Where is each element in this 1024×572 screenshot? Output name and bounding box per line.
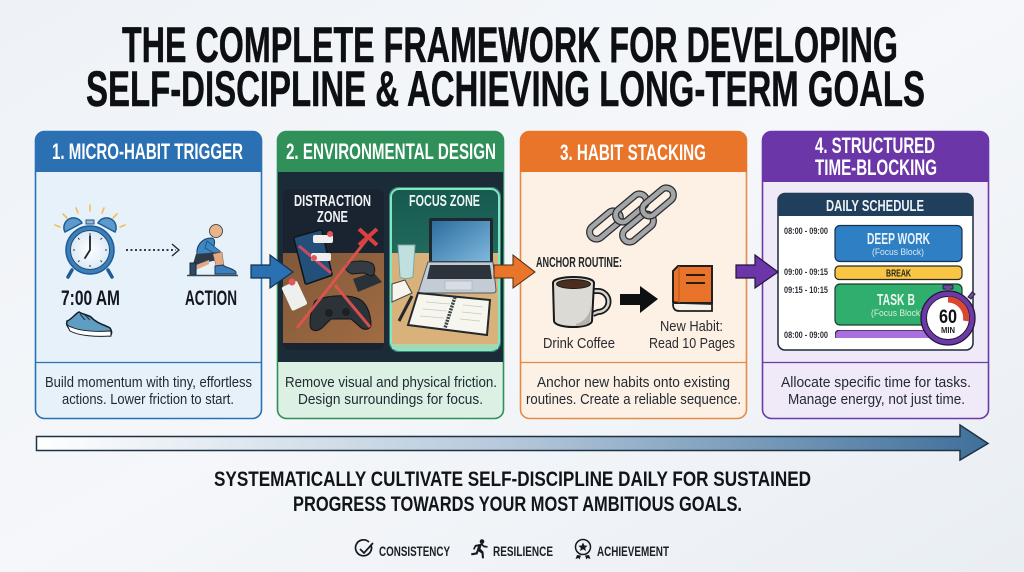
arrow: trigger to action xyxy=(126,244,179,256)
chart: daily schedule: 09:15 - 10:15 xyxy=(784,285,828,295)
label: new habit xyxy=(649,319,735,352)
label: consistency: CONSISTENCY xyxy=(379,544,450,559)
label: 7:00 AM: 7:00 AM xyxy=(61,287,120,310)
arrow: step 1 to 2 xyxy=(251,255,293,288)
label: resilience: RESILIENCE xyxy=(493,544,553,559)
label: anchor routine: ANCHOR ROUTINE: xyxy=(536,255,622,271)
icon: sneaker xyxy=(67,312,112,336)
icon: alarm clock xyxy=(55,205,125,277)
text block: step 1 description: actions. Lower friction to start. xyxy=(62,392,234,408)
icon: achievement badge xyxy=(576,540,590,560)
chart: daily schedule: TASK B xyxy=(877,292,915,309)
text block: step 1 description: Build momentum with tiny, effortless xyxy=(45,375,252,391)
chart: daily schedule: DEEP WORK xyxy=(867,231,930,248)
heading: step 4: TIME-BLOCKING xyxy=(815,155,937,180)
title xyxy=(86,17,925,117)
icon: consistency check xyxy=(356,540,373,556)
footer: values xyxy=(356,539,670,560)
text block: step 4 description: Manage energy, not just time. xyxy=(788,392,965,408)
chart: daily schedule: (Focus Block) xyxy=(872,247,924,257)
icon: person tying shoe xyxy=(187,224,238,276)
icon: 60-minute stopwatch xyxy=(921,285,975,345)
text block: closing statement xyxy=(214,467,811,516)
heading: step 1: 1. MICRO-HABIT TRIGGER xyxy=(52,139,243,164)
arrow: step 2 to 3 xyxy=(494,255,535,288)
text block: step 4 description xyxy=(781,375,971,408)
icon: chain links xyxy=(587,185,676,245)
heading: step 1 xyxy=(35,131,262,172)
arrow: progress timeline xyxy=(36,425,988,460)
chart: daily schedule: 08:00 - 09:00 xyxy=(784,330,828,340)
scene: distraction zone xyxy=(281,189,384,350)
heading: step 2 xyxy=(277,131,504,172)
heading: step 3: 3. HABIT STACKING xyxy=(560,140,706,165)
text block: step 1 description xyxy=(45,375,252,408)
scene: focus zone xyxy=(390,188,500,352)
arrow: routine to habit xyxy=(620,286,658,313)
label: new habit: Read 10 Pages xyxy=(649,336,735,352)
text block: closing statement: SYSTEMATICALLY CULTIVATE SELF-DISCIPLINE DAILY FOR SUSTAINED xyxy=(214,467,811,491)
label: action: ACTION xyxy=(185,287,237,310)
chart: daily schedule: 08:00 - 09:00 xyxy=(784,226,828,236)
label: new habit: New Habit: xyxy=(660,319,723,335)
text block: step 3 description: routines. Create a reliable sequence. xyxy=(526,392,741,408)
chart: daily schedule: BREAK xyxy=(886,268,912,280)
heading: step 3 xyxy=(520,131,747,172)
heading: step 4 xyxy=(762,131,989,182)
icon: 60-minute stopwatch: MIN xyxy=(941,326,955,335)
chart: daily schedule: 09:00 - 09:15 xyxy=(784,267,828,277)
panel: environmental design xyxy=(277,131,504,418)
icon: orange book xyxy=(673,266,712,311)
text block: step 3 description: Anchor new habits onto existing xyxy=(537,375,730,391)
arrow: step 3 to 4 xyxy=(736,255,778,288)
scene: focus zone: FOCUS ZONE xyxy=(409,193,480,210)
panel: habit stacking xyxy=(520,131,747,418)
text block: step 4 description: Allocate specific time for tasks. xyxy=(781,375,971,391)
chart: daily schedule: DAILY SCHEDULE xyxy=(826,198,924,215)
text block: step 2 description: Remove visual and physical friction. xyxy=(285,375,497,391)
text block: step 3 description xyxy=(526,375,741,408)
heading: step 2: 2. ENVIRONMENTAL DESIGN xyxy=(286,139,496,164)
scene: distraction zone: DISTRACTION xyxy=(294,193,371,210)
icon: coffee mug xyxy=(553,277,608,327)
panel: structured time-blocking xyxy=(762,131,989,418)
text block: closing statement: PROGRESS TOWARDS YOUR MOST AMBITIOUS GOALS. xyxy=(293,492,742,516)
chart: daily schedule: (Focus Block) xyxy=(871,308,923,318)
text block: step 2 description: Design surroundings for focus. xyxy=(298,392,483,408)
icon: runner xyxy=(471,539,488,558)
panel: micro-habit trigger xyxy=(35,131,262,418)
icon: 60-minute stopwatch: 60 xyxy=(939,307,957,328)
text block: step 2 description xyxy=(285,375,497,408)
label: achievement: ACHIEVEMENT xyxy=(597,544,670,559)
scene: distraction zone: ZONE xyxy=(317,209,348,226)
heading: step 4: 4. STRUCTURED xyxy=(815,133,935,158)
chart: daily schedule xyxy=(778,193,973,350)
label: drink coffee: Drink Coffee xyxy=(543,336,615,352)
